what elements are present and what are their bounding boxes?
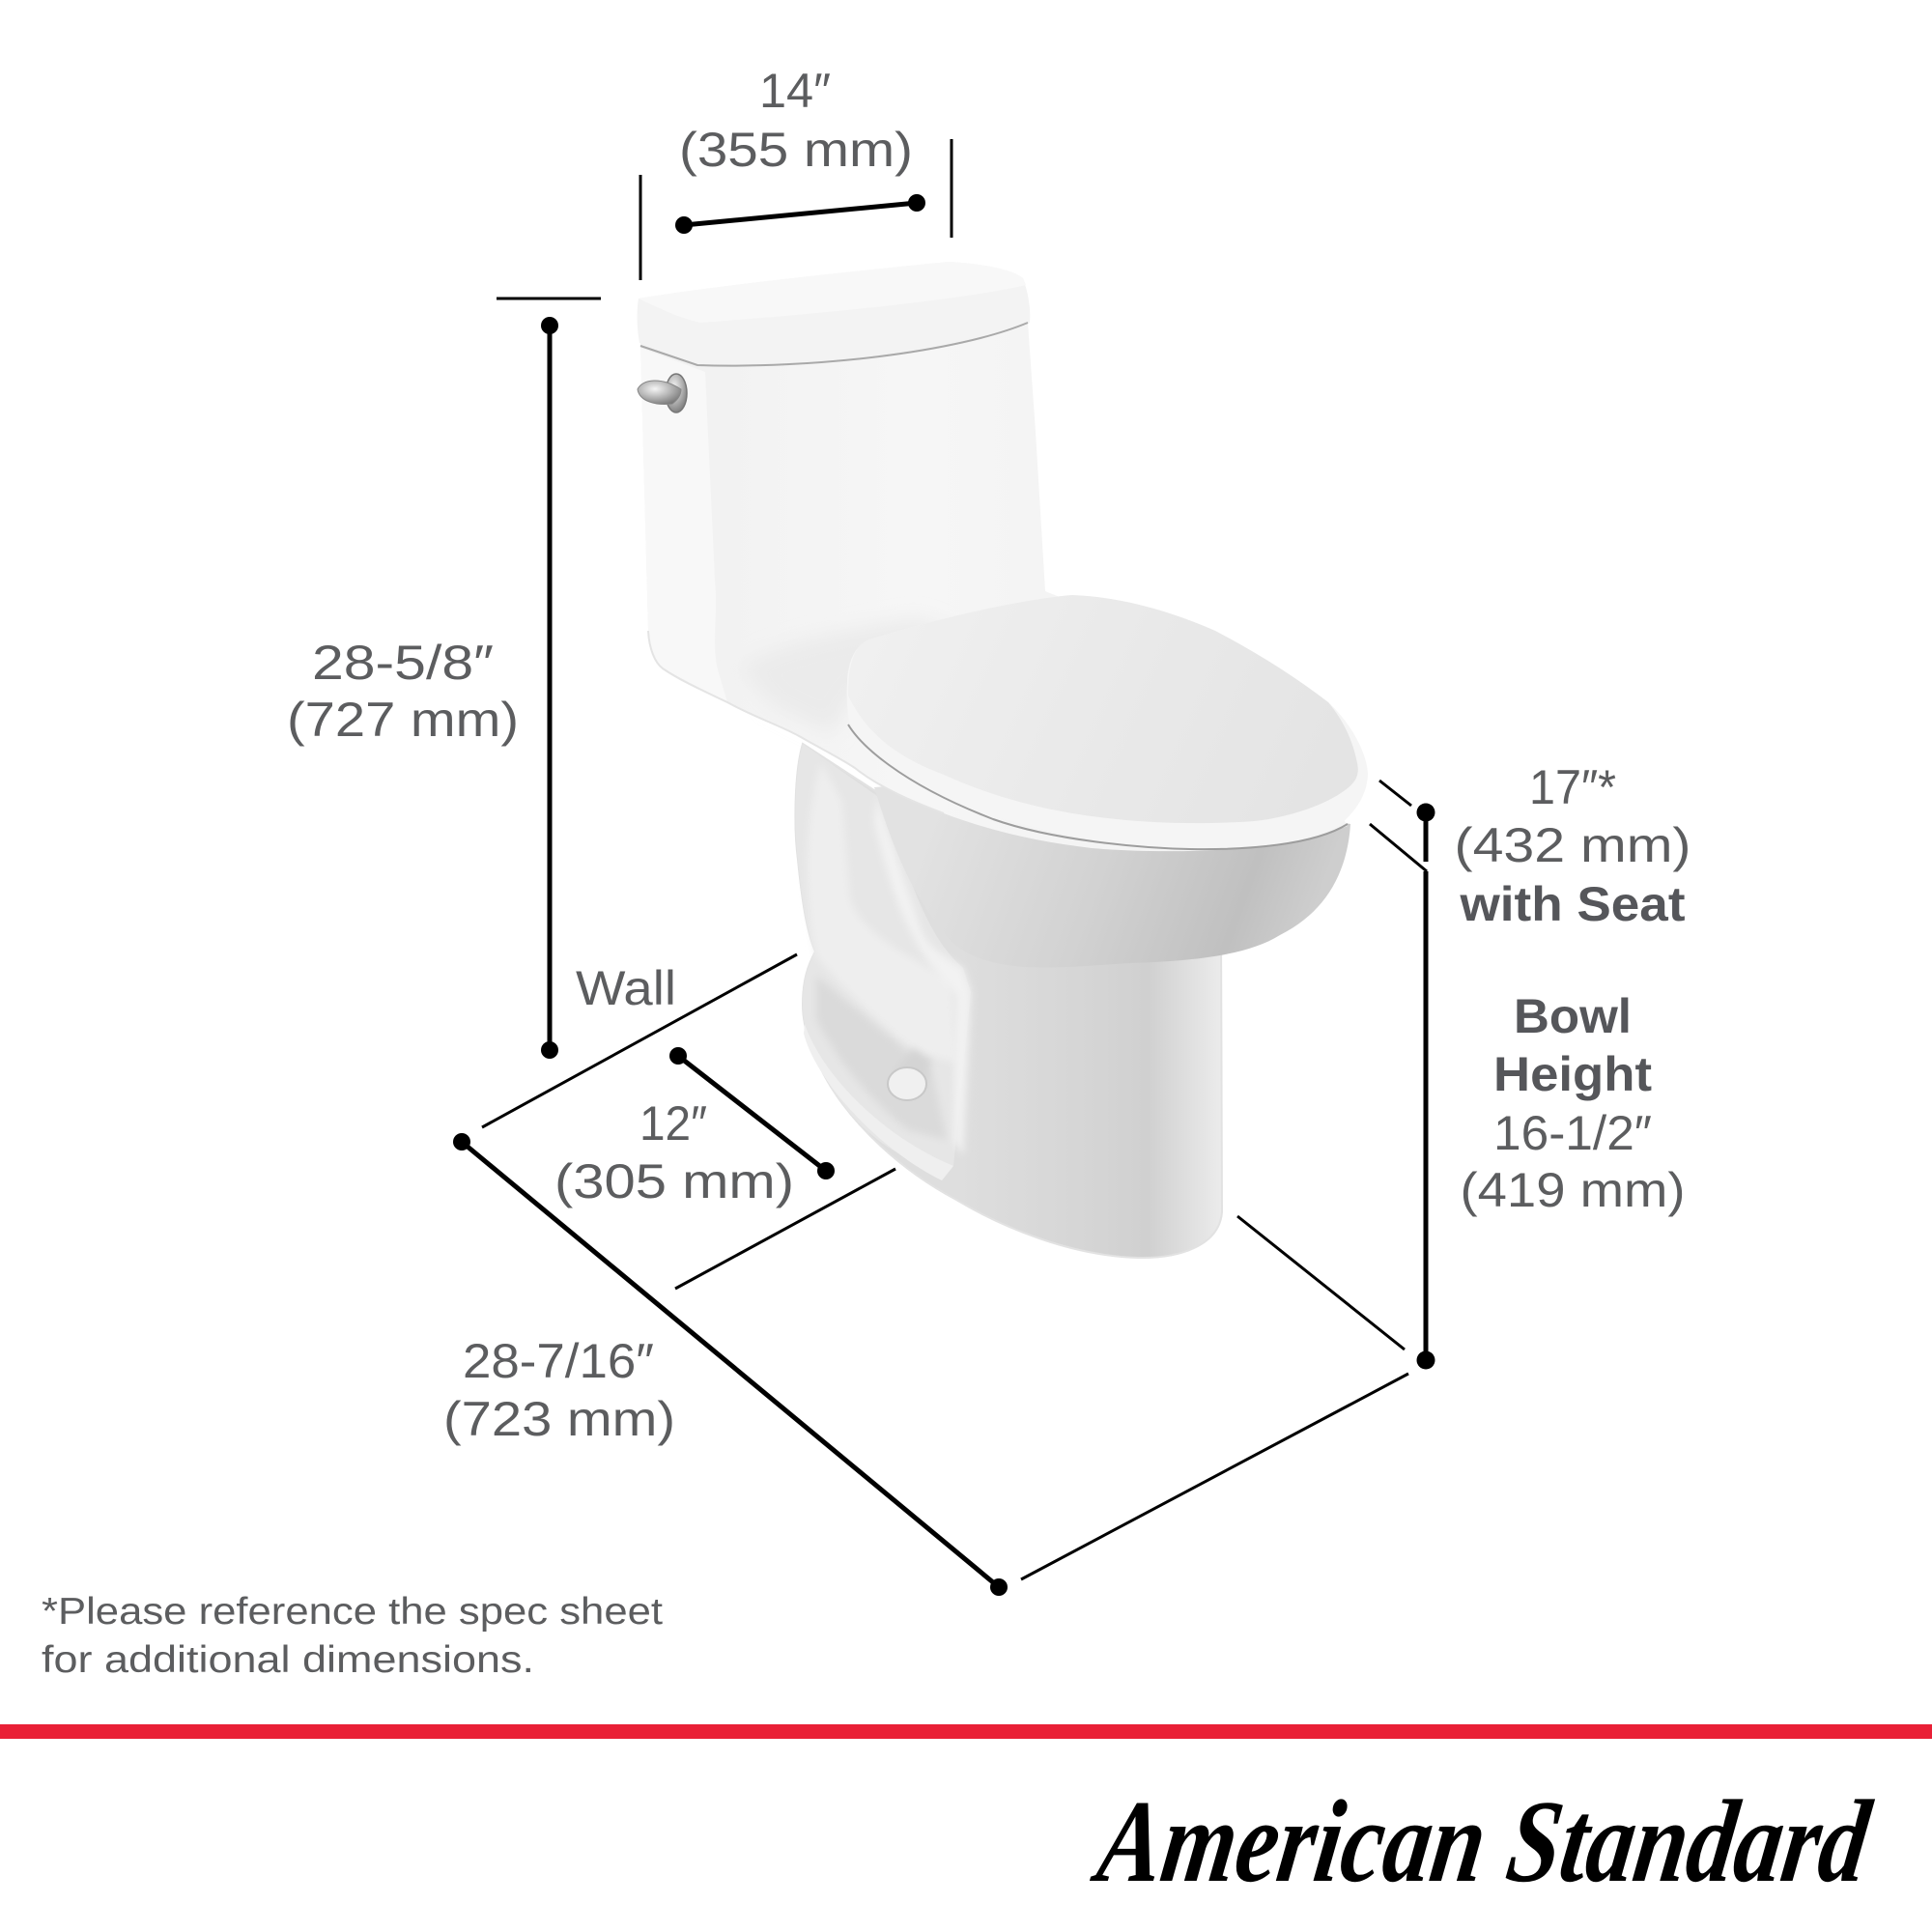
label: 28-7/16 in: (723 mm) xyxy=(443,1392,675,1446)
tank lid xyxy=(638,262,1030,367)
label: 12 in xyxy=(554,1096,794,1208)
label: 14 in xyxy=(679,64,913,177)
footnote: for additional dimensions. xyxy=(42,1639,534,1681)
label: 28-5/8 in xyxy=(287,636,519,747)
label: 12 in: 12″ xyxy=(639,1096,707,1151)
label: 28-7/16 in: 28-7/16″ xyxy=(463,1334,654,1388)
toilet bowl xyxy=(874,773,1350,967)
label: bowl height 16-1/2 in: Height xyxy=(1493,1047,1652,1101)
label: 17 in with seat: with Seat xyxy=(1459,877,1686,931)
label: 17 in with seat xyxy=(1455,760,1690,931)
label: 17 in with seat: 17″* xyxy=(1529,760,1616,814)
tank body and rim xyxy=(640,323,1348,851)
toilet pedestal xyxy=(795,744,1222,1258)
flush lever xyxy=(638,374,687,412)
toilet illustration xyxy=(638,262,1368,1258)
label: bowl height 16-1/2 in: 16-1/2″ xyxy=(1493,1106,1652,1160)
label: bowl height 16-1/2 in xyxy=(1461,989,1685,1217)
dimension: overall height xyxy=(497,298,601,1059)
label: bowl height 16-1/2 in: Bowl xyxy=(1514,989,1632,1043)
red divider bar xyxy=(0,1724,1932,1739)
footnote: *Please reference the spec sheet xyxy=(42,1591,663,1633)
tank shading xyxy=(739,618,966,734)
dimension: rough-in 12 in xyxy=(669,1047,895,1289)
footnote xyxy=(42,1591,663,1681)
toilet seat lid xyxy=(847,595,1368,849)
dimension: wall line xyxy=(482,954,797,1127)
tank and rim edge shading xyxy=(648,631,944,813)
label: 14 in: 14″ xyxy=(759,64,831,118)
dimension: tank width 14 in xyxy=(640,139,952,280)
tank side panel xyxy=(640,348,727,702)
label: 14 in: (355 mm) xyxy=(679,123,913,177)
dimension: bowl height xyxy=(1237,781,1435,1370)
label: 12 in: (305 mm) xyxy=(554,1154,794,1208)
label: wall: Wall xyxy=(576,961,676,1015)
label: bowl height 16-1/2 in: (419 mm) xyxy=(1461,1163,1685,1217)
label: 28-7/16 in xyxy=(443,1334,675,1446)
label: 17 in with seat: (432 mm) xyxy=(1455,818,1690,872)
dimension: overall depth xyxy=(453,1133,1408,1596)
bolt cap xyxy=(888,1048,932,1100)
label: 28-5/8 in: 28-5/8″ xyxy=(312,636,494,690)
label: 28-5/8 in: (727 mm) xyxy=(287,693,519,747)
